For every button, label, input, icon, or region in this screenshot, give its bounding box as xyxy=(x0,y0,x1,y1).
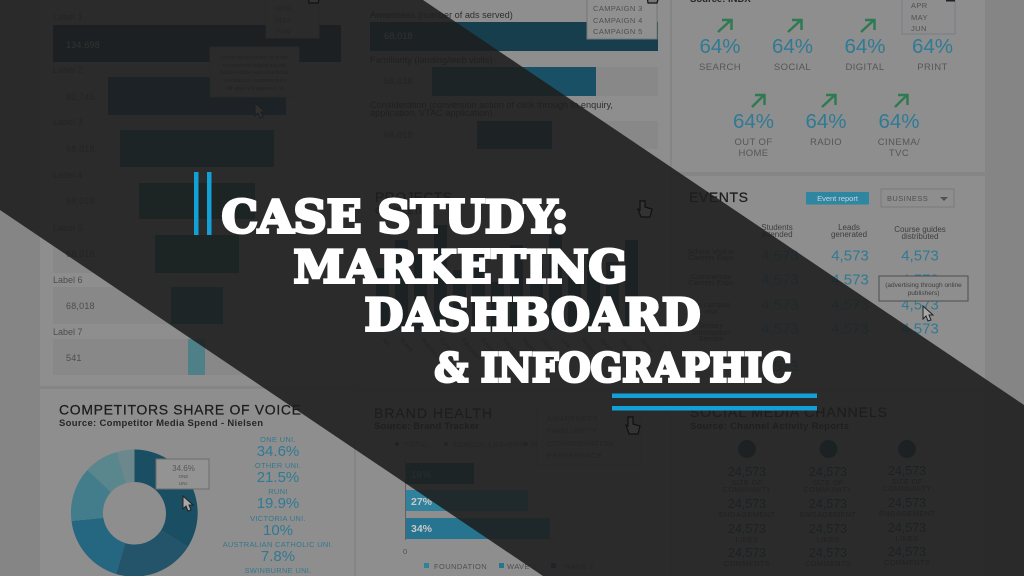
panel: brand health: BRAND HEALTH xyxy=(374,405,492,421)
rotated axis labels: Library xyxy=(539,337,556,355)
title line: case study: CASE STUDY: xyxy=(222,190,568,244)
bar 4: Label 4 xyxy=(53,170,83,180)
social stats: 24,573 xyxy=(888,521,926,535)
bar 5: Label 5 xyxy=(53,223,83,233)
metric: digital xyxy=(844,20,886,73)
panel: projects xyxy=(356,176,670,388)
bar 1 xyxy=(53,12,341,62)
bar 2 xyxy=(53,65,341,115)
donut legend: 10% xyxy=(263,522,293,539)
metric: radio: 64% xyxy=(805,110,847,133)
donut legend: 21.5% xyxy=(257,469,299,486)
donut legend: 34.6% xyxy=(257,443,299,460)
metric: out of home: HOME xyxy=(738,148,769,159)
metric: out of home: OUT OF xyxy=(734,137,773,148)
panel: awareness funnel: 68,018 xyxy=(384,31,413,41)
tooltip: elit vitae est egestas, id. xyxy=(226,86,285,92)
bar 2: 82,745 xyxy=(66,92,95,102)
events table: 4,573 xyxy=(761,248,799,264)
month dropdown: JUN xyxy=(275,27,291,36)
cursors xyxy=(183,103,933,511)
social stats: COMMUNITY xyxy=(723,485,771,494)
social stats: SIZE OF xyxy=(891,477,923,486)
campaign dropdown xyxy=(587,0,657,39)
events table: Information xyxy=(692,328,730,337)
metric: print: 64% xyxy=(912,35,953,58)
donut legend: 19.9% xyxy=(257,495,299,512)
panel: awareness funnel: Consideration (conversion action of click through to enquiry, xyxy=(370,100,613,110)
metric: out of home xyxy=(733,95,774,159)
series filter: SCHOOL LEAVERS xyxy=(452,440,525,449)
bar 7 xyxy=(53,327,341,375)
icon: facebook xyxy=(738,440,756,458)
events table: Course guides xyxy=(894,225,946,234)
bar 5 xyxy=(53,223,341,273)
events table: distributed xyxy=(902,232,938,241)
bar chart: 18% xyxy=(411,470,431,481)
metric: social: SOCIAL xyxy=(774,62,811,73)
metric dropdown: CONSIDERATION xyxy=(547,439,614,448)
social stats: COMMUNITY xyxy=(883,484,931,493)
donut legend: AUSTRALIAN CATHOLIC UNI. xyxy=(223,540,333,549)
panel: social media channels: Source: Channel Activity Reports xyxy=(690,421,849,432)
social stats: 24,573 xyxy=(888,545,926,559)
bar 6: 68,018 xyxy=(66,301,95,311)
chart legend xyxy=(424,562,594,571)
events table: visit xyxy=(705,307,718,316)
social stats: COMMUNITY xyxy=(804,485,852,494)
event report button xyxy=(806,192,869,204)
bar 3: 68,018 xyxy=(66,144,95,154)
rotated axis labels: Art xyxy=(380,337,390,347)
panel: awareness funnel: 68,018 xyxy=(384,76,413,86)
series filter xyxy=(395,440,565,449)
panel: competitors share of voice: Source: Competitor Media Spend - Nielsen xyxy=(59,418,263,429)
bar chart: 0 xyxy=(403,547,408,556)
bar 4 xyxy=(53,170,341,219)
panel: media channels xyxy=(672,0,985,172)
panel: awareness funnel: application, VTAC application) xyxy=(370,108,492,118)
donut legend: ONE UNI. xyxy=(260,435,296,444)
donut legend: 7.8% xyxy=(261,548,295,565)
metric: radio: RADIO xyxy=(810,137,842,148)
metric dropdown xyxy=(537,408,641,466)
donut legend: VICTORIA UNI. xyxy=(250,514,306,523)
metric dropdown: PREFERENCE xyxy=(547,451,602,460)
events table: 4,573 xyxy=(761,272,799,288)
events table: 4,573 xyxy=(761,358,799,375)
events table: Service xyxy=(698,334,724,343)
events table: attended xyxy=(761,230,793,239)
month dropdown: MAY xyxy=(911,13,928,22)
events table: 4,573 xyxy=(901,272,939,288)
rotated axis labels: Corporate xyxy=(438,337,461,362)
events table: 4,573 xyxy=(831,248,869,264)
bar 4: 68,018 xyxy=(66,196,95,206)
panel: social media channels xyxy=(672,392,985,576)
bar 7: Label 7 xyxy=(53,327,83,337)
chart legend: WAVE 2 xyxy=(564,562,594,571)
social stats: SIZE OF xyxy=(812,478,844,487)
bar 6 xyxy=(53,275,341,324)
title line: infographic: & INFOGRAPHIC xyxy=(434,346,792,392)
tooltip: consectetur adipiscing elit. xyxy=(223,63,288,69)
month dropdown xyxy=(902,0,955,34)
events table: 4,573 xyxy=(761,296,799,314)
events table: 4,573 xyxy=(901,320,939,338)
rotated axis labels: Research xyxy=(579,337,601,361)
panel: projects: PROJECTS xyxy=(375,189,452,205)
tooltip xyxy=(879,276,968,301)
metric: search: 64% xyxy=(699,35,741,58)
social stats: 24,573 xyxy=(809,497,847,511)
events table: 4,573 xyxy=(901,248,939,264)
events table: Tertiary xyxy=(699,321,724,330)
tooltip xyxy=(210,47,299,97)
events table: Leads xyxy=(838,223,860,232)
social stats: 24,573 xyxy=(809,546,847,560)
social stats: ENGAGEMENT xyxy=(800,510,856,519)
panel: awareness funnel: 68,018 xyxy=(384,130,413,140)
accent: horizontal blue bars xyxy=(612,394,817,410)
donut legend: RUNI xyxy=(268,487,288,496)
series filter: MATURE xyxy=(531,440,565,449)
donut tooltip xyxy=(156,459,209,489)
metric: digital: 64% xyxy=(844,35,886,58)
campaign dropdown: CAMPAIGN 5 xyxy=(593,27,643,36)
event report button: Event report xyxy=(817,194,859,203)
bar 2: Label 2 xyxy=(53,65,83,75)
metric dropdown: FAMILIARITY xyxy=(547,426,597,435)
month dropdown: APR xyxy=(911,1,928,10)
bar 6: Label 6 xyxy=(53,275,83,285)
rotated axis labels: Future xyxy=(500,337,517,355)
bar 5: 68,018 xyxy=(66,249,95,259)
donut tooltip: UNI. xyxy=(179,481,188,486)
social stats: 24,573 xyxy=(888,496,926,510)
metric dropdown: AWARENESS xyxy=(547,414,598,423)
rotated axis labels: Business xyxy=(419,337,440,360)
metric: cinema: CINEMA/ xyxy=(878,137,920,148)
bar 3 xyxy=(53,117,341,167)
metric: social: 64% xyxy=(772,35,813,58)
tooltip: publishers) xyxy=(908,290,939,297)
social stats: 24,573 xyxy=(888,464,926,478)
social stats: SIZE OF xyxy=(731,478,763,487)
events table: 4,573 xyxy=(831,320,869,338)
bar chart xyxy=(403,460,550,556)
events table: On campus xyxy=(692,300,730,309)
chart legend: FOUNDATION xyxy=(434,562,487,571)
column chart xyxy=(376,225,638,330)
title block xyxy=(222,190,792,392)
rotated axis labels xyxy=(380,337,654,362)
rotated axis labels: Law xyxy=(559,337,572,350)
events table xyxy=(687,223,946,375)
social stats: 24,573 xyxy=(728,465,766,479)
panel: brand health: Source: Brand Tracker xyxy=(374,421,479,432)
metric: digital: DIGITAL xyxy=(845,62,885,73)
donut legend: SWINBURNE UNI. xyxy=(244,566,312,575)
events table: 4,573 xyxy=(831,296,869,314)
cursor hands above overlay xyxy=(308,0,659,434)
social stats: COMMENTS xyxy=(724,559,770,568)
events table: 4,573 xyxy=(761,320,799,338)
panel: awareness funnel: Familiarity (landing/web visits) xyxy=(370,55,493,65)
social stats: COMMENTS xyxy=(805,559,851,568)
social stats: LIKES xyxy=(817,535,839,544)
panel: events xyxy=(672,176,985,388)
icon: twitter xyxy=(820,440,838,458)
rotated axis labels: Sport xyxy=(598,337,612,353)
month dropdown xyxy=(266,0,319,38)
metric: cinema xyxy=(878,95,920,159)
metric: print xyxy=(912,35,953,73)
events table: Students xyxy=(761,223,793,232)
title line: marketing: MARKETING xyxy=(294,240,628,294)
tooltip: Suspendisse sed urna tellus. xyxy=(220,70,291,76)
rotated axis labels: Education xyxy=(459,337,481,362)
metric: cinema: TVC xyxy=(889,148,909,159)
tooltip: Lorem ipsum dolor sit amet, xyxy=(221,55,289,61)
campaign dropdown: CAMPAIGN 4 xyxy=(593,16,643,25)
business dropdown: BUSINESS xyxy=(887,194,928,203)
chart legend: WAVE 1 xyxy=(507,562,537,571)
metric: out of home: 64% xyxy=(733,110,774,133)
social stats: COMMENTS xyxy=(884,558,930,567)
donut chart xyxy=(71,450,198,576)
month dropdown: APR xyxy=(275,4,292,13)
social stats: ENGAGEMENT xyxy=(719,510,775,519)
rotated axis labels: Events xyxy=(479,337,496,355)
panel: awareness funnel xyxy=(356,0,670,386)
business dropdown xyxy=(881,189,954,207)
social stats: 24,573 xyxy=(728,497,766,511)
social stats: 24,573 xyxy=(809,522,847,536)
rotated axis labels: Health xyxy=(520,337,536,355)
metric: print: PRINT xyxy=(917,62,948,73)
events table: generated xyxy=(831,230,867,239)
panel: competitors share of voice: COMPETITORS SHARE OF VOICE xyxy=(59,402,301,418)
donut legend xyxy=(223,435,333,575)
donut legend: OTHER UNI. xyxy=(255,461,301,470)
social stats: 24,573 xyxy=(809,465,847,479)
rotated axis labels: Brand xyxy=(398,337,413,354)
bar chart: 27% xyxy=(411,496,433,508)
icon: facebook: f xyxy=(745,444,749,456)
rotated axis labels: Student xyxy=(618,337,637,357)
events table: Careers Expo xyxy=(688,253,734,262)
events table: Commercial xyxy=(691,272,731,281)
panel: awareness funnel: Awareness (number of ads served) xyxy=(370,10,513,20)
social stats: 24,573 xyxy=(728,522,766,536)
metric: cinema: 64% xyxy=(878,110,920,133)
metric: radio xyxy=(805,95,847,148)
donut tooltip: 34.6% xyxy=(172,464,195,473)
month dropdown: MAY xyxy=(275,16,292,25)
events table: 4,573 xyxy=(831,272,869,288)
title line: dashboard: DASHBOARD xyxy=(364,288,700,342)
social stats: 24,573 xyxy=(728,546,766,560)
social stats: LIKES xyxy=(736,535,758,544)
events table: Careers Expo xyxy=(688,278,734,287)
social stats: ENGAGEMENT xyxy=(879,509,935,518)
metric: search xyxy=(699,20,741,73)
campaign dropdown: CAMPAIGN 3 xyxy=(593,4,643,13)
bar 1: Label 1 xyxy=(53,12,83,22)
panel: brand health xyxy=(356,392,670,576)
series filter: TOTAL xyxy=(404,440,429,449)
tooltip: (advertising through online xyxy=(885,282,962,289)
bar 3: Label 3 xyxy=(53,117,83,127)
panel: events: EVENTS xyxy=(689,189,748,205)
social stats xyxy=(719,464,935,568)
tooltip: Vestibulum condimentum xyxy=(224,78,286,84)
bar 7: 541 xyxy=(66,353,82,363)
icon: instagram xyxy=(898,440,916,458)
bar chart: 34% xyxy=(411,523,433,535)
panel: funnel labels xyxy=(40,0,354,386)
panel: competitors share of voice xyxy=(40,389,354,576)
events table: 4,573 xyxy=(901,296,939,314)
metric: search: SEARCH xyxy=(699,62,741,73)
events table: School Visit or xyxy=(687,247,735,256)
month dropdown: JUN xyxy=(911,24,927,33)
donut tooltip: ONE xyxy=(179,474,188,479)
rotated axis labels: Venue xyxy=(638,337,654,355)
metric: social xyxy=(772,20,813,73)
bar 1: 134,698 xyxy=(66,40,100,50)
social stats: LIKES xyxy=(896,534,918,543)
panel: projects: COMPLETED xyxy=(375,206,432,216)
accent: vertical blue bars xyxy=(194,172,212,235)
panel: social media channels: SOCIAL MEDIA CHANNELS xyxy=(690,404,887,420)
